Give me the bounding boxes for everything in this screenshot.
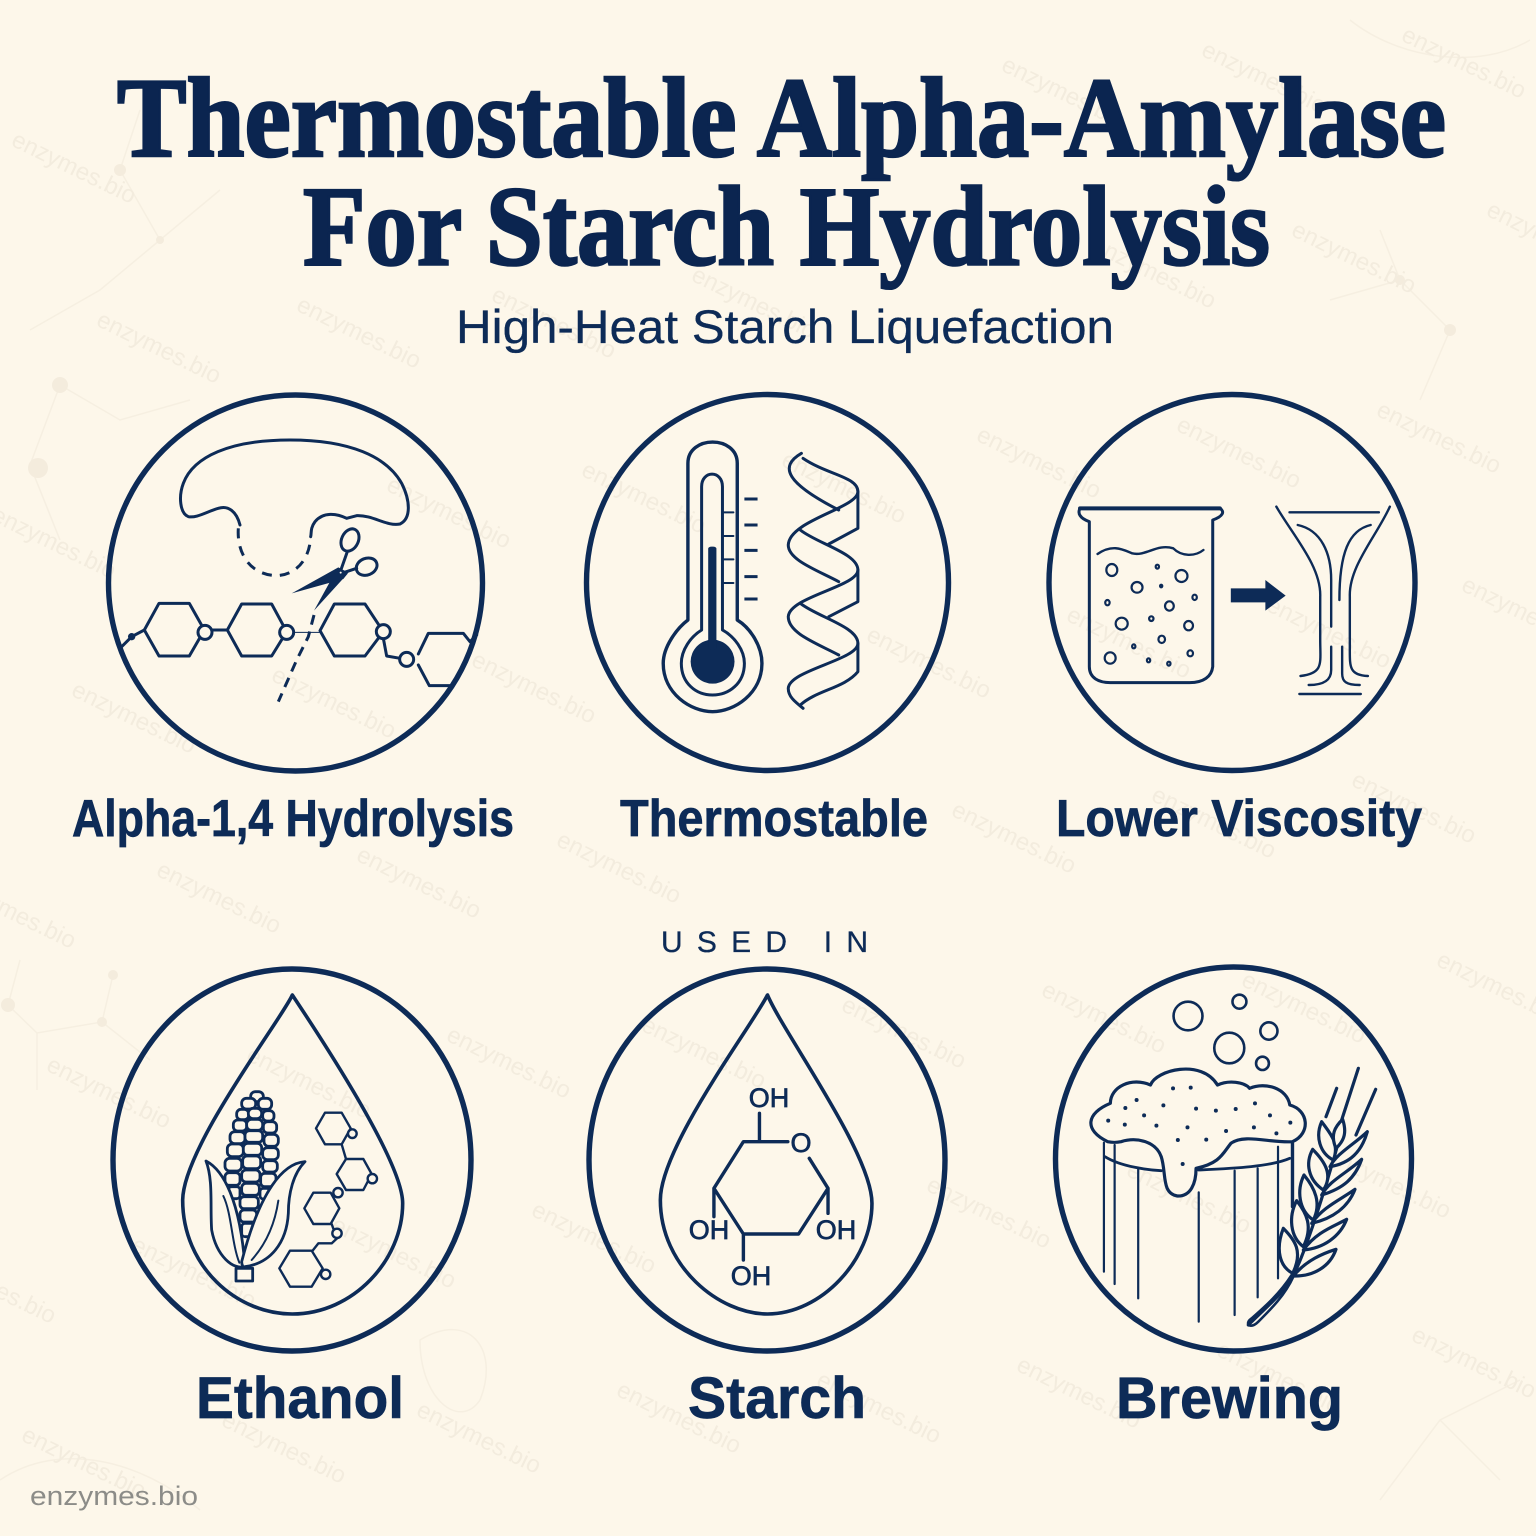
watermark pattern: enzymes.bio	[862, 621, 995, 704]
watermark pattern: enzymes.bio	[922, 1171, 1055, 1254]
watermark pattern: enzymes.bio	[467, 646, 600, 729]
watermark pattern: enzymes.bio	[17, 1421, 150, 1504]
icon: beer foam and bubbles	[1091, 995, 1305, 1322]
icon: corn cob	[206, 1092, 305, 1281]
label: Thermostable	[620, 790, 928, 848]
watermark pattern: enzymes.bio	[1062, 601, 1195, 684]
title: Thermostable Alpha-Amylase	[117, 56, 1446, 181]
watermark pattern: enzymes.bio	[1212, 1336, 1345, 1419]
watermark pattern: enzymes.bio	[1372, 396, 1505, 479]
watermark pattern: enzymes.bio	[42, 1051, 175, 1134]
icon: drop with glucose ring: OH	[689, 1215, 729, 1245]
watermark pattern: enzymes.bio	[1397, 21, 1530, 104]
icon: drop with glucose ring: OH	[816, 1215, 856, 1245]
watermark pattern: enzymes.bio	[1347, 766, 1480, 849]
watermark pattern: enzymes.bio	[997, 51, 1130, 134]
icon: drop with corn and molecules	[183, 995, 403, 1314]
watermark pattern: enzymes.bio	[152, 856, 285, 939]
panel: ethanol	[113, 969, 471, 1431]
watermark pattern: enzymes.bio	[92, 306, 225, 389]
watermark pattern: enzymes.bio	[637, 1011, 770, 1094]
watermark pattern: enzymes.bio	[777, 446, 910, 529]
watermark pattern: enzymes.bio	[242, 1041, 375, 1124]
watermark pattern: enzymes.bio	[1147, 781, 1280, 864]
icon: wheat ear	[1248, 1068, 1376, 1326]
title	[117, 56, 1446, 290]
watermark pattern: enzymes.bio	[487, 281, 620, 364]
watermark pattern: enzymes.bio	[217, 1406, 350, 1489]
footer brand: enzymes.bio	[30, 1481, 198, 1511]
watermark pattern: enzymes.bio	[552, 826, 685, 909]
icon: drop with glucose ring: O	[790, 1128, 812, 1158]
label: Starch	[688, 1366, 866, 1431]
watermark pattern: enzymes.bio	[837, 991, 970, 1074]
watermark pattern: enzymes.bio	[947, 796, 1080, 879]
label: Brewing	[1116, 1366, 1343, 1431]
label: Lower Viscosity	[1056, 790, 1422, 848]
panel: thermostable	[586, 394, 948, 848]
watermark pattern: enzymes.bio	[577, 456, 710, 539]
watermark pattern: enzymes.bio	[352, 841, 485, 924]
subtitle: High-Heat Starch Liquefaction	[456, 300, 1114, 353]
watermark pattern: enzymes.bio	[1237, 966, 1370, 1049]
watermark pattern: enzymes.bio	[1322, 1141, 1455, 1224]
watermark pattern: enzymes.bio	[292, 291, 425, 374]
watermark pattern: enzymes.bio	[1287, 216, 1420, 299]
watermark pattern: enzymes.bio	[67, 676, 200, 759]
panel: starch	[589, 969, 945, 1431]
icon: beaker to viscous flow	[1079, 507, 1390, 694]
label: Ethanol	[196, 1366, 404, 1431]
label: Alpha-1,4 Hydrolysis	[72, 790, 514, 848]
watermark pattern: enzymes.bio	[1037, 976, 1170, 1059]
watermark pattern: enzymes.bio	[1012, 1351, 1145, 1434]
watermark pattern: enzymes.bio	[327, 1211, 460, 1294]
panel: alpha-1,4 hydrolysis	[72, 395, 514, 848]
watermark pattern: enzymes.bio	[127, 1231, 260, 1314]
icon: enzyme cutting starch chain	[122, 440, 477, 702]
icon: thermometer and helix	[663, 442, 858, 712]
watermark pattern: enzymes.bio	[1172, 411, 1305, 494]
icon: drop with glucose ring: OH	[749, 1083, 789, 1113]
watermark pattern: enzymes.bio	[612, 1376, 745, 1459]
watermark pattern: enzymes.bio	[527, 1196, 660, 1279]
watermark pattern: enzymes.bio	[1122, 1156, 1255, 1239]
watermark pattern: enzymes.bio	[1197, 36, 1330, 119]
icon: drop with glucose ring: OH	[731, 1261, 771, 1291]
watermark pattern: enzymes.bio	[972, 421, 1105, 504]
used in heading: USED IN	[661, 926, 868, 959]
watermark pattern: enzymes.bio	[442, 1021, 575, 1104]
panel: brewing	[1056, 967, 1412, 1431]
watermark pattern: enzymes.bio	[382, 471, 515, 554]
watermark pattern: enzymes.bio	[412, 1396, 545, 1479]
watermark pattern: enzymes.bio	[812, 1366, 945, 1449]
panel: lower viscosity	[1049, 394, 1422, 848]
watermark pattern: enzymes.bio	[1087, 231, 1220, 314]
watermark pattern: enzymes.bio	[7, 126, 140, 209]
icon: drop with glucose ring	[660, 995, 872, 1314]
watermark pattern: enzymes.bio	[687, 261, 820, 344]
watermark pattern: enzymes.bio	[267, 661, 400, 744]
watermark pattern: enzymes.bio	[1262, 591, 1395, 674]
title: For Starch Hydrolysis	[303, 164, 1270, 290]
